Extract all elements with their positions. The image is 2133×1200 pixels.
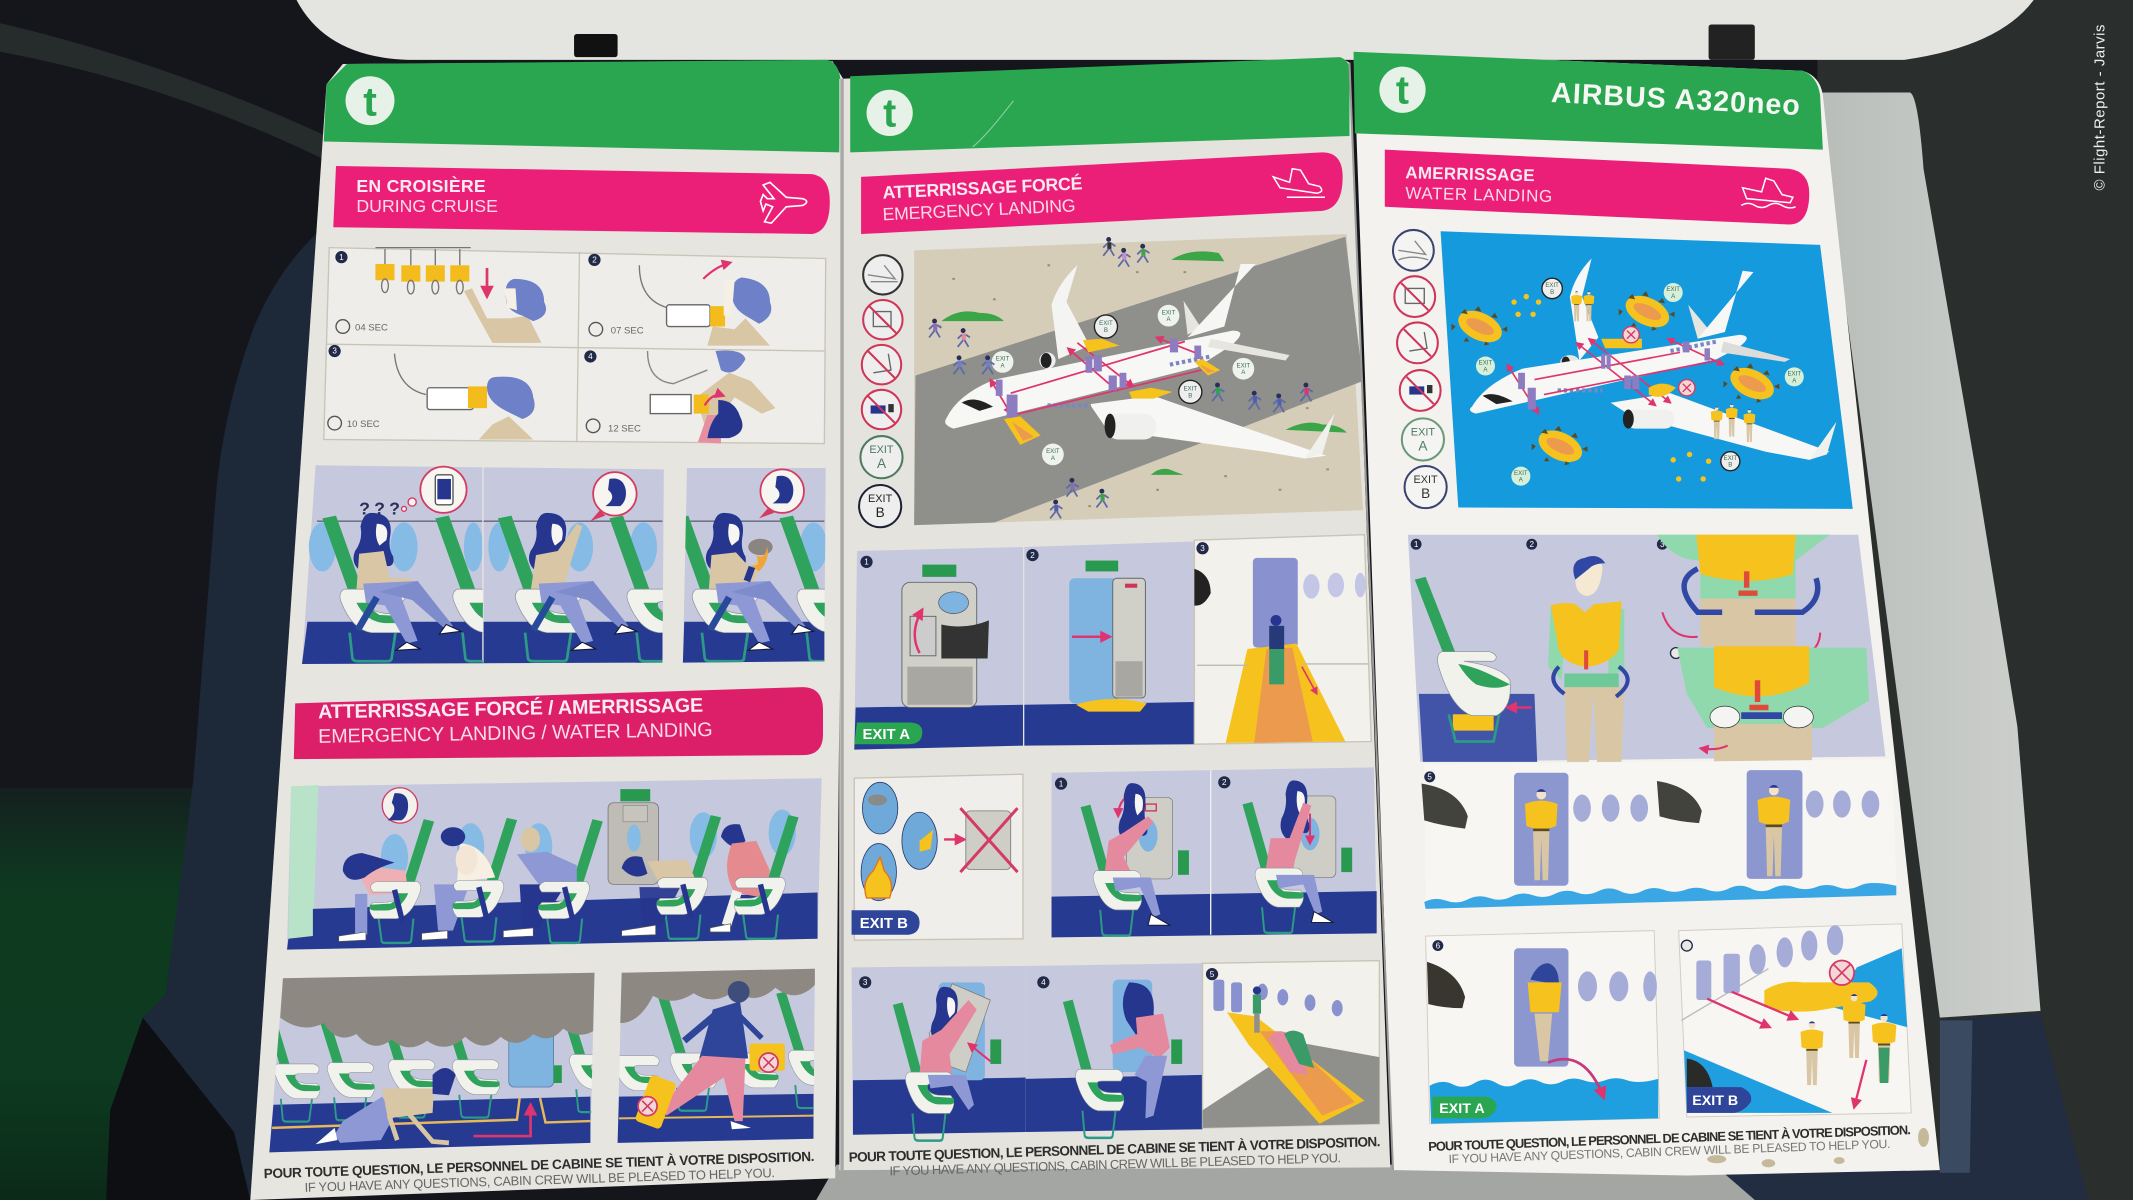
exit markers: EXIT [1787, 371, 1801, 378]
smoke cloud [280, 973, 594, 1047]
woman with vest [1528, 963, 1562, 1061]
water band [1424, 883, 1896, 909]
pictogram column [1393, 230, 1447, 508]
pink heading: during cruise: DURING CRUISE [356, 196, 498, 216]
running evacuees [929, 237, 1313, 518]
pictogram column: B [876, 505, 885, 520]
exit markers: EXIT [1545, 282, 1559, 289]
pink heading: emergency landing: EMERGENCY LANDING [882, 195, 1076, 224]
exit markers: B [1188, 392, 1192, 399]
life vest steps 1-4 [1408, 535, 1885, 762]
step 2: place mask: 07 SEC [611, 325, 644, 336]
exit markers: A [1051, 455, 1056, 462]
passenger raising hand [498, 512, 663, 663]
pink heading: emergency / water landing: ATTERRISSAGE FORCÉ / AMERRISSAGE [318, 694, 703, 723]
step 3: remove door: 3 [863, 978, 868, 987]
crossed out door [960, 808, 1018, 872]
brace passenger 5: pregnant [710, 815, 799, 939]
callout: brace call [382, 788, 418, 823]
step 5: inflate after exit, two door views [1422, 759, 1896, 909]
pink heading: emergency / water landing [294, 687, 823, 759]
exit markers: A [1671, 293, 1676, 300]
pictogram column [859, 255, 903, 527]
pink heading: water landing: AMERRISSAGE [1405, 163, 1535, 185]
exit markers [992, 305, 1254, 465]
brace position panel [287, 778, 822, 950]
yellow bag with prohibited mark [750, 1044, 785, 1072]
slides [1004, 339, 1220, 445]
exit B warning panel [852, 774, 1023, 940]
step 4: exit through window: 4 [1041, 978, 1046, 987]
step 1: door handle [860, 556, 989, 707]
question marks: ? ? ? [359, 498, 400, 518]
badge: EXIT A: EXIT A [862, 726, 910, 743]
pictogram column: EXIT [1411, 426, 1435, 438]
badge: EXIT A: EXIT A [1439, 1101, 1485, 1117]
exit B steps 3-5 [852, 961, 1379, 1141]
step 1: door handle: 1 [864, 558, 869, 567]
paper stains along bottom edge [1707, 1128, 1929, 1167]
badge: EXIT B: EXIT B [860, 915, 908, 932]
pink heading: water landing [1385, 150, 1809, 224]
step 2: pull handle [1218, 776, 1352, 933]
pink heading: during cruise: EN CROISIÈRE [356, 175, 486, 196]
logo: t [867, 90, 913, 136]
exit markers: A [1519, 477, 1524, 484]
pictogram column: A [1418, 438, 1428, 453]
brace passenger 2 with infant [422, 818, 517, 942]
exit markers: EXIT [1237, 362, 1250, 369]
pictogram column: B [1421, 486, 1430, 501]
floor path light [272, 1098, 590, 1128]
step 4: tighten strap [1670, 646, 1869, 762]
footer text: IF YOU HAVE ANY QUESTIONS, CABIN CREW WILL BE PLEASED TO HELP YOU. [304, 1165, 775, 1195]
logo: t [1379, 67, 1426, 113]
step 4: help others: 4 [588, 352, 593, 361]
step 3: fasten strap: 3 [1660, 540, 1665, 549]
step 4: exit through window [1037, 976, 1182, 1138]
swimmers in circles [1511, 294, 1711, 482]
exit markers: A [1166, 316, 1171, 323]
no baggage panel [618, 968, 815, 1143]
pink heading: emergency landing: ATTERRISSAGE FORCÉ [882, 172, 1083, 203]
footer text: POUR TOUTE QUESTION, LE PERSONNEL DE CABINE SE TIENT À VOTRE DISPOSITION. [848, 1134, 1381, 1165]
exit markers: A [1001, 362, 1006, 369]
yellow suitcase with prohibited mark [635, 1074, 677, 1130]
pictogram column: EXIT [868, 493, 893, 505]
windows with hazards [861, 782, 937, 901]
evacuation crawl panel [262, 973, 617, 1152]
brace passenger 3 [503, 819, 603, 943]
exit markers: EXIT [1666, 286, 1680, 293]
oxygen mask steps panel [324, 248, 826, 444]
exit A slide jump panel [1426, 931, 1660, 1124]
passengers on wings [1571, 291, 1755, 442]
exit A door panels [854, 535, 1371, 750]
logo: t: t [1396, 68, 1409, 112]
step 3: wear mask: 3 [332, 347, 337, 356]
badge: EXIT B: EXIT B [1692, 1093, 1738, 1109]
step 1: pull mask: 04 SEC [355, 323, 388, 334]
three passengers on wing [1801, 994, 1896, 1085]
badge: EXIT A [1432, 1097, 1497, 1118]
exit markers: A [1792, 377, 1797, 384]
step 1: pull mask: 1 [339, 253, 344, 262]
vegetation [941, 251, 1347, 475]
exit markers: EXIT [1099, 320, 1113, 327]
step 5: slide down [1203, 961, 1379, 1128]
icon: airplane [760, 182, 807, 223]
step 2: place mask: 2 [592, 256, 597, 265]
crawling passenger [316, 1068, 456, 1144]
exit markers: EXIT [1514, 470, 1528, 477]
logo: t: t [363, 79, 377, 125]
badge: EXIT B [852, 910, 920, 935]
panel: left folded card page [250, 60, 864, 1200]
callout: crew member [590, 472, 637, 521]
exit B steps 1-2 [1052, 767, 1377, 937]
exit markers [1476, 278, 1804, 486]
step 2: door opens: 2 [1030, 551, 1035, 560]
pink heading: during cruise [333, 166, 830, 234]
step 2: pull handle: 2 [1222, 778, 1227, 787]
exit markers: EXIT [1046, 448, 1060, 455]
step 4: help others: 12 SEC [608, 423, 641, 434]
exit markers: EXIT [1183, 385, 1197, 392]
step 2: door opens [1026, 549, 1147, 712]
doors [996, 339, 1201, 418]
step 3: remove door [859, 976, 1001, 1141]
exit markers: A [1241, 369, 1246, 376]
title: aircraft type: AIRBUS A320neo [1550, 77, 1801, 122]
step 3: wear mask: 10 SEC [347, 419, 380, 430]
green header band with logo [850, 57, 1349, 152]
brace passenger 4 [622, 815, 721, 939]
step 2: don vest [1526, 539, 1628, 762]
step 2: place mask [588, 254, 771, 346]
pictogram column: A [877, 456, 887, 471]
step 3: wear mask [328, 345, 535, 439]
plane [945, 264, 1334, 459]
pink heading: emergency / water landing: EMERGENCY LANDING / WATER LANDING [318, 719, 713, 748]
step 4: help others [584, 350, 775, 444]
footer text: POUR TOUTE QUESTION, LE PERSONNEL DE CABINE SE TIENT À VOTRE DISPOSITION. [264, 1149, 815, 1181]
water landing aerial scene [1441, 231, 1853, 509]
emergency landing aerial scene [914, 234, 1363, 525]
exit markers: B [1550, 289, 1554, 296]
step 1: vest under seat: 1 [1414, 540, 1419, 549]
panel: right folded card page [1349, 52, 1940, 1176]
pink heading: emergency landing [861, 152, 1343, 234]
step 3: jump onto slide: 3 [1200, 544, 1205, 553]
step 5: inflate after exit, two door views: 5 [1427, 773, 1432, 782]
badge: EXIT A [854, 722, 922, 744]
exit markers: EXIT [1479, 360, 1493, 367]
icon: plane on water [1741, 178, 1796, 208]
exit markers: EXIT [1724, 455, 1737, 462]
exit markers: B [1104, 327, 1108, 334]
exit arrows [990, 337, 1201, 415]
step 1: vest under seat [1411, 539, 1537, 762]
exit A slide jump panel: 6 [1436, 941, 1441, 950]
red arrow [473, 1105, 531, 1136]
photo credit: © Flight-Report - Jarvis [2091, 24, 2108, 190]
life rafts [1451, 289, 1779, 468]
pictogram column: EXIT [869, 444, 894, 456]
cabin panels: ask the crew [302, 465, 694, 664]
step 3: jump onto slide [1194, 542, 1368, 743]
exit markers: EXIT [996, 356, 1010, 363]
footer text: IF YOU HAVE ANY QUESTIONS, CABIN CREW WILL BE PLEASED TO HELP YOU. [889, 1150, 1341, 1179]
icon: smoking phone [744, 539, 773, 582]
plane [1470, 259, 1836, 460]
cabin panel: report smoke or fire [682, 468, 826, 663]
step 5: slide down: 5 [1210, 970, 1215, 979]
badge: EXIT B [1687, 1087, 1751, 1113]
step 1: grab handle [1055, 778, 1189, 936]
footer text [848, 1134, 1381, 1179]
footer text: IF YOU HAVE ANY QUESTIONS, CABIN CREW WILL BE PLEASED TO HELP YOU. [1448, 1137, 1891, 1166]
callout: crew member [759, 469, 804, 518]
exit door with sign [608, 789, 658, 884]
walking passenger [662, 981, 762, 1129]
footer text: POUR TOUTE QUESTION, LE PERSONNEL DE CABINE SE TIENT À VOTRE DISPOSITION. [1428, 1122, 1911, 1154]
logo: t: t [883, 92, 896, 136]
exit markers: EXIT [1162, 309, 1176, 316]
panel: centre folded card page [839, 57, 1390, 1179]
step 1: grab handle: 1 [1059, 779, 1064, 788]
brace passenger 1 [339, 819, 434, 943]
exit B wing panel [1679, 924, 1911, 1117]
logo: t [346, 76, 394, 125]
exit markers: B [1728, 462, 1732, 469]
callout: smartphone thought bubble [402, 467, 467, 513]
pictogram column: EXIT [1414, 474, 1438, 486]
passenger confused about phone [322, 512, 483, 663]
step 1: pull mask [335, 248, 546, 343]
step 2: don vest: 2 [1529, 540, 1534, 549]
green header band with logo and aircraft name [1354, 52, 1823, 150]
icon: landing plane [1273, 169, 1325, 197]
step 3: fasten strap [1657, 535, 1830, 660]
pink heading: water landing: WATER LANDING [1405, 184, 1552, 206]
exit markers: A [1483, 366, 1488, 373]
green header band with logo [324, 60, 841, 152]
